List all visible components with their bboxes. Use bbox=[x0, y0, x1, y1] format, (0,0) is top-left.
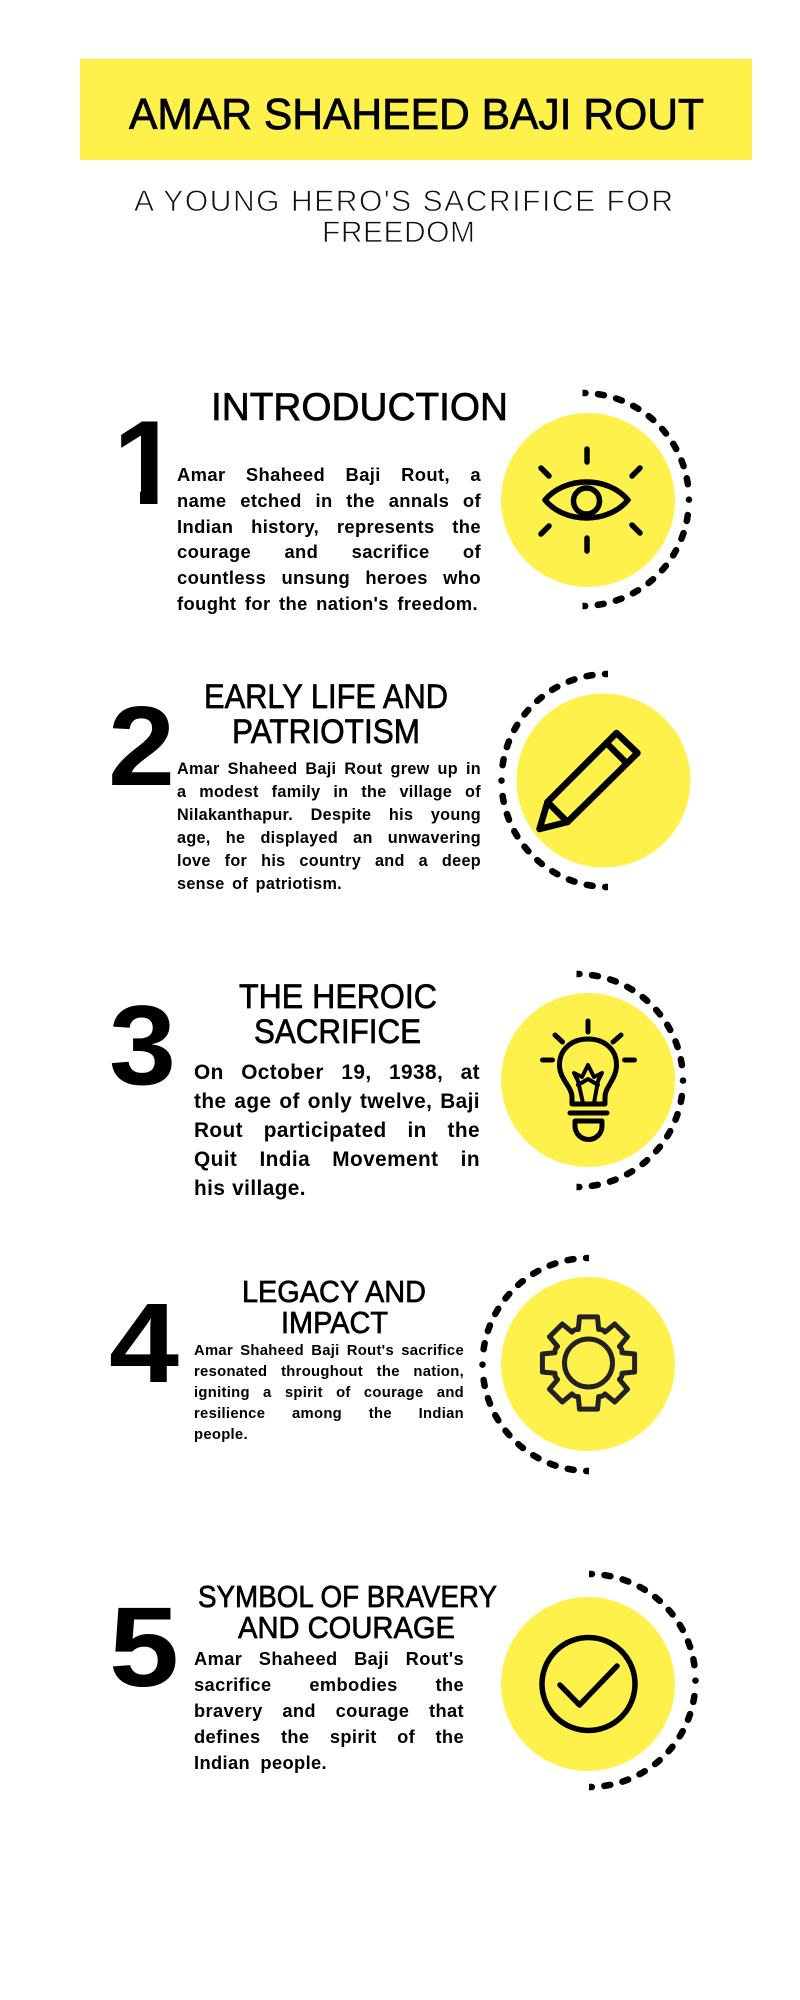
panel: section 1 introduction bbox=[110, 386, 689, 618]
panel: section 5 symbol of bravery bbox=[109, 1574, 696, 1787]
text block: introduction bbox=[177, 462, 481, 618]
text block: symbol of bravery: sacrifice embodies the bbox=[194, 1674, 464, 1695]
text block: early life: Nilakanthapur. Despite his young bbox=[177, 806, 481, 824]
text block: early life bbox=[177, 758, 481, 898]
icon circle bbox=[501, 1597, 675, 1771]
number 2: 2 bbox=[108, 683, 175, 809]
text block: legacy: igniting a spirit of courage and bbox=[194, 1385, 464, 1401]
text block: symbol of bravery: Amar Shaheed Baji Rout's bbox=[194, 1648, 464, 1669]
number 3: 3 bbox=[109, 982, 176, 1108]
number 4: 4 bbox=[109, 1280, 179, 1406]
text block: heroic sacrifice bbox=[194, 1058, 482, 1218]
panel: section 3 heroic sacrifice bbox=[109, 974, 683, 1218]
number 5: 5 bbox=[109, 1584, 179, 1710]
text block: heroic sacrifice: Rout participated in the bbox=[194, 1119, 480, 1142]
text block: introduction: Indian history, represents the bbox=[177, 516, 481, 537]
dashed arc bbox=[483, 1258, 589, 1471]
dashed arc bbox=[502, 674, 608, 887]
title: AMAR SHAHEED BAJI ROUT bbox=[129, 90, 704, 139]
icon: eye bbox=[541, 449, 640, 551]
heading: symbol of bravery and courage: AND COURAGE bbox=[238, 1610, 455, 1645]
text block: heroic sacrifice: On October 19, 1938, at bbox=[194, 1061, 480, 1084]
heading: legacy and impact: IMPACT bbox=[281, 1305, 388, 1340]
text block: symbol of bravery: Indian people. bbox=[194, 1752, 327, 1773]
text block: legacy: resonated throughout the nation, bbox=[194, 1364, 464, 1380]
text block: introduction: fought for the nation's freedom. bbox=[177, 593, 478, 614]
dashed arc bbox=[589, 1574, 696, 1787]
icon circle bbox=[501, 1277, 675, 1451]
icon: gear bbox=[542, 1317, 635, 1409]
heading: symbol of bravery and courage bbox=[198, 1579, 497, 1645]
dashed arc bbox=[576, 974, 683, 1187]
heading: legacy and impact bbox=[242, 1274, 426, 1340]
icon circle bbox=[516, 694, 690, 868]
panel: section 2 early life bbox=[108, 674, 690, 898]
text block: introduction: countless unsung heroes who bbox=[177, 567, 481, 588]
panel: section 4 legacy bbox=[109, 1258, 675, 1471]
subtitle bbox=[134, 185, 673, 249]
icon circle bbox=[501, 993, 675, 1167]
icon circle bbox=[501, 413, 675, 587]
text block: early life: a modest family in the village of bbox=[177, 783, 481, 801]
text block: heroic sacrifice: the age of only twelve, Baji bbox=[194, 1090, 480, 1113]
text block: early life: love for his country and a deep bbox=[177, 852, 481, 870]
text block: introduction: Amar Shaheed Baji Rout, a bbox=[177, 464, 481, 485]
heading: the heroic sacrifice: SACRIFICE bbox=[254, 1013, 421, 1051]
heading: early life and patriotism: EARLY LIFE AND bbox=[204, 678, 448, 716]
heading: the heroic sacrifice: THE HEROIC bbox=[239, 978, 437, 1016]
text block: legacy: Amar Shaheed Baji Rout's sacrifice bbox=[194, 1343, 464, 1359]
subtitle: A YOUNG HERO'S SACRIFICE FOR bbox=[134, 185, 673, 218]
text block: symbol of bravery: bravery and courage that bbox=[194, 1700, 464, 1721]
text block: symbol of bravery: defines the spirit of the bbox=[194, 1726, 464, 1747]
text block: legacy: resilience among the Indian bbox=[194, 1406, 464, 1422]
title banner bbox=[80, 59, 752, 160]
heading: early life and patriotism bbox=[204, 678, 448, 751]
icon: check mark bbox=[542, 1638, 635, 1730]
heading: legacy and impact: LEGACY AND bbox=[242, 1274, 426, 1309]
text block: heroic sacrifice: Quit India Movement in bbox=[194, 1148, 480, 1171]
text block: early life: Amar Shaheed Baji Rout grew up in bbox=[177, 760, 481, 778]
dashed arc bbox=[582, 393, 689, 606]
subtitle: FREEDOM bbox=[322, 216, 475, 249]
text block: heroic sacrifice: his village. bbox=[194, 1177, 306, 1200]
text block: legacy: people. bbox=[194, 1427, 248, 1443]
icon: pencil bbox=[540, 733, 638, 829]
heading: introduction: INTRODUCTION bbox=[211, 386, 508, 429]
text block: legacy bbox=[194, 1341, 466, 1453]
heading: early life and patriotism: PATRIOTISM bbox=[232, 713, 420, 751]
text block: introduction: courage and sacrifice of bbox=[177, 541, 481, 562]
text block: early life: age, he displayed an unwavering bbox=[177, 829, 481, 847]
text block: early life: sense of patriotism. bbox=[177, 875, 342, 893]
text block: symbol of bravery bbox=[194, 1646, 466, 1782]
text block: introduction: name etched in the annals of bbox=[177, 490, 481, 511]
number 1: 1 bbox=[113, 396, 180, 530]
heading: the heroic sacrifice bbox=[239, 978, 437, 1051]
heading: symbol of bravery and courage: SYMBOL OF BRAVERY bbox=[198, 1579, 497, 1614]
icon: light bulb bbox=[542, 1021, 634, 1140]
